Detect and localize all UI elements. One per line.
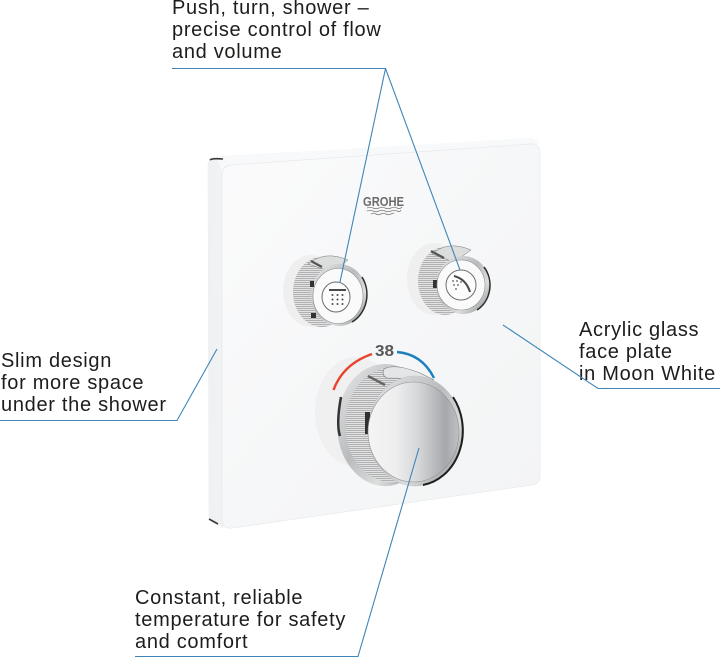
temperature value: 38 bbox=[375, 343, 394, 360]
thermostat dial bbox=[337, 364, 463, 486]
cold arc bbox=[397, 352, 434, 378]
callout: slim design: for more space bbox=[1, 372, 144, 394]
callout: acrylic glass bbox=[503, 319, 720, 388]
hot arc bbox=[334, 354, 372, 390]
leader line: thermostat bbox=[135, 448, 419, 656]
callout: constant temperature bbox=[135, 448, 419, 656]
plate top edge bbox=[214, 138, 540, 171]
knurled collar bbox=[418, 247, 472, 315]
icon: rain shower bbox=[452, 276, 470, 292]
plate side edge bbox=[208, 139, 532, 528]
dial cap bbox=[368, 382, 459, 482]
temperature stop button bbox=[383, 367, 434, 380]
plate front bbox=[222, 144, 540, 528]
right shower dial bbox=[407, 243, 490, 315]
knurled collar bbox=[293, 257, 351, 327]
GROHE logo bbox=[363, 194, 404, 215]
callout: acrylic glass: Acrylic glass bbox=[579, 319, 699, 341]
callout: push, turn, shower: precise control of flow bbox=[172, 19, 382, 41]
callout: slim design: under the shower bbox=[1, 394, 167, 416]
callout: push, turn, shower bbox=[172, 0, 460, 282]
leader line: plate edge bbox=[0, 349, 217, 420]
callout: constant temperature: and comfort bbox=[135, 631, 248, 653]
callout: constant temperature: temperature for safety bbox=[135, 609, 346, 631]
callout: push, turn, shower: and volume bbox=[172, 41, 282, 63]
icon: hand shower head bbox=[329, 289, 346, 305]
callout: acrylic glass: in Moon White bbox=[579, 363, 716, 385]
leader lines: dials bbox=[172, 68, 460, 282]
face plate bbox=[208, 138, 540, 528]
GROHE logo: GROHE bbox=[363, 194, 404, 209]
callout: constant temperature: Constant, reliable bbox=[135, 587, 303, 609]
temperature scale bbox=[334, 343, 434, 390]
callout: acrylic glass: face plate bbox=[579, 341, 673, 363]
left spray dial bbox=[283, 255, 367, 327]
callout: slim design bbox=[0, 349, 217, 420]
chrome ring bbox=[368, 376, 462, 486]
dial shadow bbox=[315, 357, 397, 467]
knurled collar bbox=[337, 364, 433, 486]
callout: slim design: Slim design bbox=[1, 350, 112, 372]
leader line: face plate bbox=[503, 325, 720, 388]
